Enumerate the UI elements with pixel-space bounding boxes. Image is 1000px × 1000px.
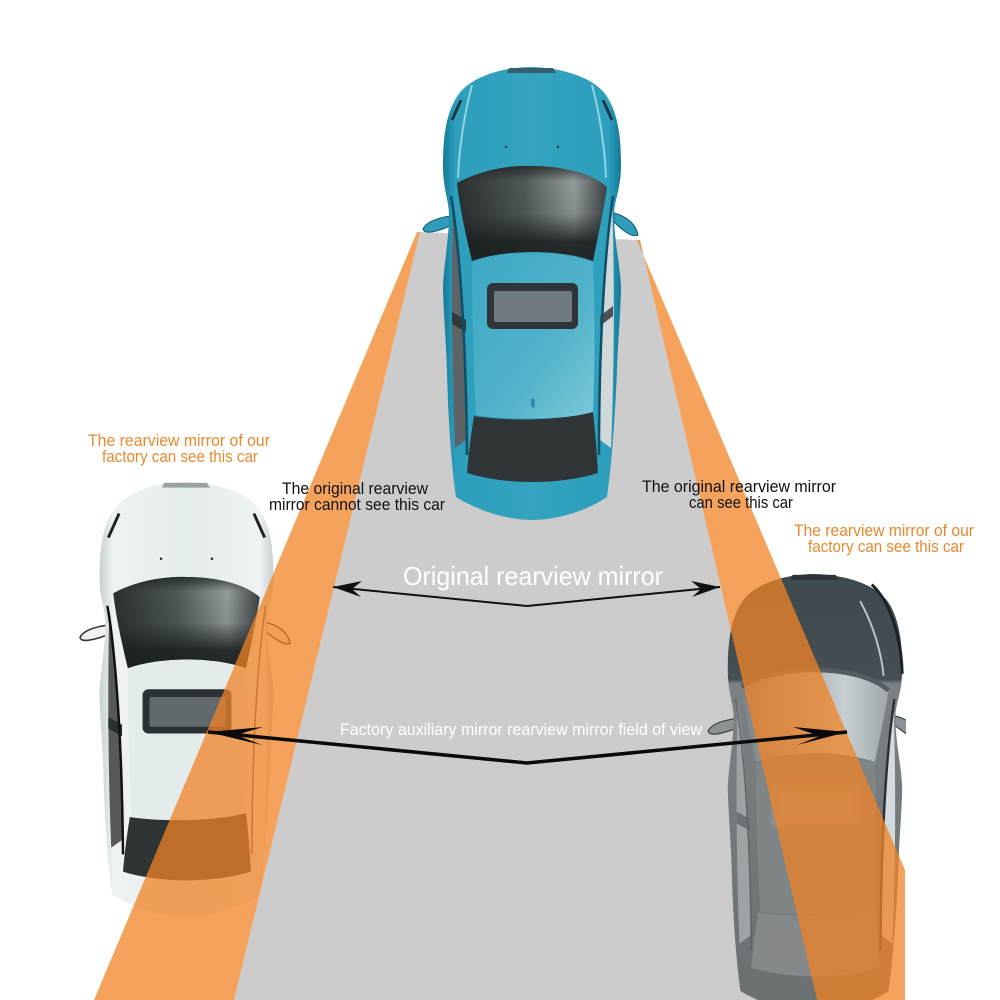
teal car hood details	[452, 85, 612, 178]
grey car roof	[756, 776, 876, 914]
white car mirrors	[80, 622, 290, 644]
grey car windshield	[742, 670, 888, 762]
teal car grille	[507, 68, 556, 73]
white car grille	[162, 483, 210, 488]
teal car roof	[472, 253, 594, 419]
grey car hood edges	[860, 585, 902, 676]
car: grey, right	[708, 574, 921, 1000]
arrow: original mirror span	[333, 581, 720, 606]
orange beam: left auxiliary mirror view	[94, 232, 420, 1000]
label: left car orange caption: The rearview mirror of our	[88, 431, 270, 450]
white car sunroof	[143, 689, 231, 733]
teal car windshield	[457, 166, 607, 261]
orange beam: right auxiliary mirror view	[637, 240, 905, 1000]
label: left car orange caption: factory can see this car	[102, 447, 258, 466]
white car roof	[128, 660, 248, 819]
label: original rearview mirror: Original rearview mirror	[403, 561, 663, 591]
teal car side windows	[451, 196, 614, 455]
teal car shark fin	[531, 398, 535, 408]
grey car body	[728, 574, 902, 1000]
car: teal, centre top	[423, 67, 638, 520]
white car windshield	[113, 577, 260, 668]
teal car rear window	[467, 412, 598, 482]
grey car side windows	[736, 699, 895, 950]
white car rear window	[123, 813, 251, 880]
white car windshield shading	[113, 577, 260, 668]
arrow: auxiliary mirror span	[208, 727, 847, 763]
white car side windows	[107, 606, 266, 854]
teal car body	[443, 67, 621, 520]
grey car rear window	[752, 912, 812, 976]
grey car sunroof	[771, 804, 777, 828]
white car hood details	[108, 514, 265, 560]
teal car mirrors	[423, 213, 638, 236]
grey car grille	[790, 575, 839, 580]
car: white, left	[80, 482, 290, 917]
grey road: original mirror field of view	[234, 232, 817, 1000]
label: factory auxiliary field of view: Factory auxiliary mirror rearview mirror field of view	[340, 720, 703, 739]
label: original mirror can see: The original rearview mirror	[642, 477, 836, 496]
grey car mirrors	[708, 716, 906, 735]
teal car windshield shading	[457, 166, 607, 261]
white car body	[100, 482, 273, 917]
label: original mirror cannot see: mirror cannot see this car	[269, 495, 445, 514]
teal car sunroof	[487, 283, 578, 329]
grey car windshield top edge	[742, 670, 888, 690]
label: right car orange caption: The rearview mirror of our	[794, 521, 974, 540]
label: original mirror can see: can see this car	[689, 493, 793, 512]
label: right car orange caption: factory can see this car	[808, 537, 964, 556]
label: original mirror cannot see: The original rearview	[282, 479, 429, 498]
